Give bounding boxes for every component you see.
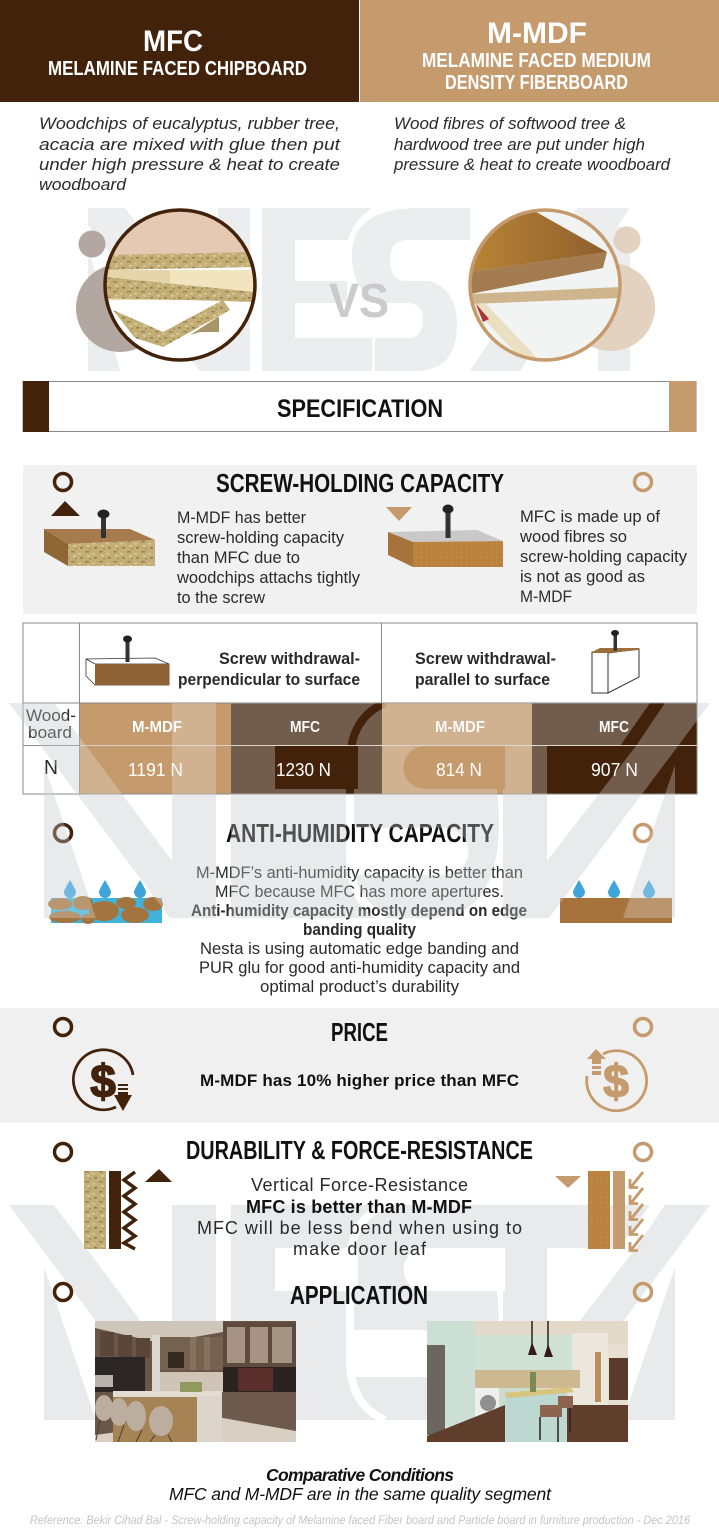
panel: screw-holding capacity [23,465,697,614]
header perpendicular: perpendicular to surface [178,670,360,689]
icon: down triangle [555,1176,581,1188]
subheading M-MDF [422,50,651,94]
column labels: M-MDF [435,719,485,736]
row label woodboard: Wood- [26,706,76,725]
background watermark band bottom [0,1205,719,1420]
values: 1191 N [128,760,183,780]
heading price: PRICE [331,1017,388,1047]
table color cells [80,703,697,794]
icon: lower price [73,1050,133,1111]
icon: lower price: $ [90,1055,116,1107]
comparative conditions note: MFC and M-MDF are in the same quality segment [169,1484,552,1504]
description M-MDF: pressure & heat to create woodboard [393,155,671,174]
background watermark band middle [0,703,719,918]
text MFC screw: M-MDF has better [177,508,306,527]
description MFC: acacia are mixed with glue then put [39,135,341,154]
text MDF screw [519,507,687,606]
marker MFC [54,1018,72,1036]
text MFC screw: to the screw [177,588,266,607]
heading screw-holding: SCREW-HOLDING CAPACITY [216,468,504,498]
values: 907 N [591,760,638,780]
photo: dark wood kitchen [95,1321,296,1442]
header perpendicular: Screw withdrawal- [219,649,360,668]
humidity text [191,863,527,996]
humidity text: optimal product’s durability [260,977,459,996]
comparative conditions note [169,1465,552,1504]
icon: down triangle [386,507,412,521]
description MFC [39,114,341,194]
humidity text: banding quality [303,920,416,939]
column labels: M-MDF [132,719,182,736]
photo: MDF [470,200,620,362]
text MDF screw: MFC is made up of [520,507,660,526]
marker M-MDF [634,1144,652,1160]
row label woodboard [26,706,76,742]
heading MFC: MFC [143,25,203,58]
icon: screw perpendicular [86,636,169,685]
humidity text: Anti-humidity capacity mostly depend on edge [191,901,527,920]
icon: screw parallel [592,630,639,693]
icon: MFC force [84,1171,135,1249]
column labels: MFC [290,719,320,736]
header perpendicular [178,649,360,689]
icon: higher price [587,1049,647,1111]
heading M-MDF: M-MDF [487,17,587,50]
humidity text: MFC because MFC has more apertures. [215,882,504,901]
icon: higher price: $ [603,1055,629,1107]
description M-MDF [393,114,671,174]
marker M-MDF [634,824,652,842]
text MFC screw [176,508,360,607]
durability text: Vertical Force-Resistance [251,1175,468,1195]
header parallel: parallel to surface [415,670,550,689]
photo: chipboard [105,210,255,360]
section: anti-humidity [48,818,672,996]
header: MFC [0,0,359,102]
marker MFC [54,824,72,842]
icon: chipboard with screw [44,510,155,566]
humidity text: M-MDF’s anti-humidity capacity is better than [196,863,523,882]
text MFC screw: than MFC due to [177,548,300,567]
subheading M-MDF: MELAMINE FACED MEDIUM [422,50,651,72]
marker M-MDF [634,1018,652,1036]
durability text [197,1175,522,1259]
description MFC: under high pressure & heat to create [39,155,340,174]
icon: MDF with screw [388,504,503,567]
marker M-MDF [634,474,652,490]
marker M-MDF [634,1284,652,1300]
panel: price [0,1008,719,1123]
row label woodboard: board [28,723,72,742]
icon: MDF force [588,1171,643,1250]
person shape right [567,226,655,351]
text MDF screw: wood fibres so [519,527,627,546]
table: screw withdrawal [23,623,697,794]
text MDF screw: M-MDF [520,587,572,606]
header: M-MDF [360,0,719,102]
description M-MDF: hardwood tree are put under high [394,135,645,154]
values [128,760,638,780]
subheading M-MDF: DENSITY FIBERBOARD [445,72,628,94]
column labels [132,719,629,736]
column labels: MFC [599,719,629,736]
price text: M-MDF has 10% higher price than MFC [200,1071,519,1090]
durability text: MFC will be less bend when using to [197,1218,522,1238]
row label N: N [44,757,58,779]
heading application: APPLICATION [290,1280,428,1310]
icon: up triangle [145,1169,172,1182]
specification heading: SPECIFICATION [277,395,443,423]
vs label: VS [329,275,389,328]
text MDF screw: is not as good as [520,567,645,586]
icon: up triangle [51,501,80,516]
reference footnote: Reference: Bekir Cihad Bal - Screw-holding capacity of Melamine faced Fiber board and Particle board in furniture production - Dec 2016 [30,1515,691,1527]
header parallel: Screw withdrawal- [415,649,556,668]
section: durability [54,1135,652,1259]
section: application [54,1280,652,1442]
text MDF screw: screw-holding capacity [520,547,687,566]
subheading MFC: MELAMINE FACED CHIPBOARD [48,58,307,80]
text MFC screw: woodchips attachs tightly [176,568,360,587]
description MFC: woodboard [39,175,127,194]
header parallel [415,649,556,689]
heading durability: DURABILITY & FORCE-RESISTANCE [186,1135,533,1165]
description MFC: Woodchips of eucalyptus, rubber tree, [39,114,340,133]
icon: MFC moisture [48,880,163,924]
comparative conditions note: Comparative Conditions [266,1465,454,1485]
marker MFC [54,1284,72,1300]
description M-MDF: Wood fibres of softwood tree & [394,114,626,133]
background watermark top [88,208,630,371]
heading anti-humidity: ANTI-HUMIDITY CAPACITY [226,818,494,848]
humidity text: PUR glu for good anti-humidity capacity and [199,958,520,977]
icon: MDF moisture [560,880,672,923]
person shape left [76,230,164,352]
text MFC screw: screw-holding capacity [177,528,344,547]
watermark overlay over table and humidity section [0,703,719,918]
marker MFC [54,1144,72,1160]
photo: pale green kitchen [427,1321,628,1442]
humidity text: Nesta is using automatic edge banding and [200,939,519,958]
durability text: make door leaf [293,1239,427,1259]
values: 814 N [436,760,482,780]
marker MFC [54,474,72,490]
durability text: MFC is better than M-MDF [246,1197,472,1217]
values: 1230 N [276,760,331,780]
specification bar [23,381,696,432]
